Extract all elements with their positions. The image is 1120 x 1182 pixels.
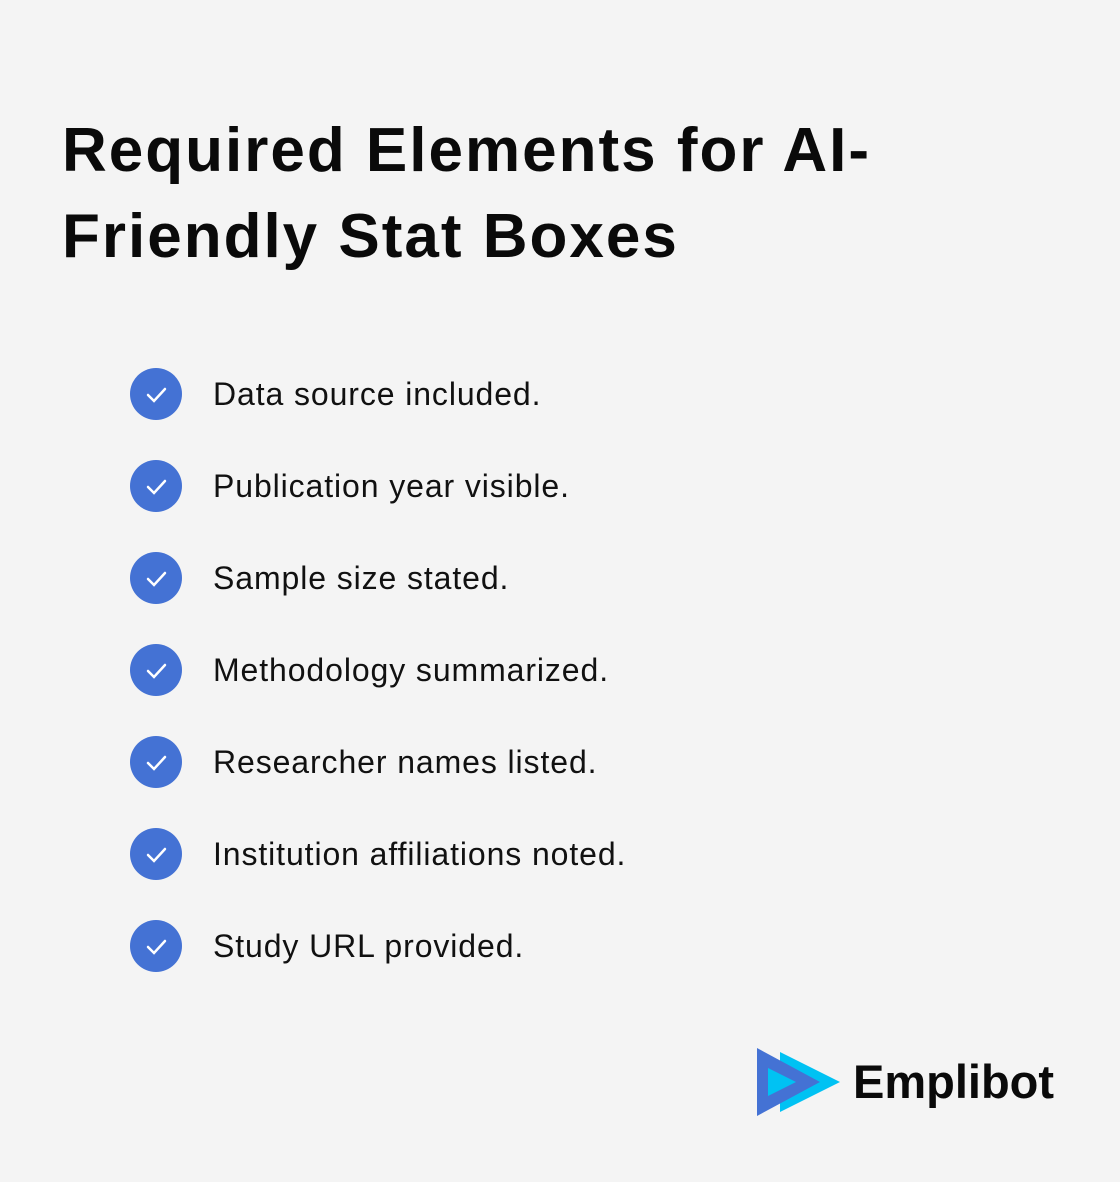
logo — [757, 1048, 1054, 1116]
item: institution — [130, 828, 626, 880]
logo: Emplibot — [853, 1055, 1054, 1108]
item: study url: Study URL provided. — [213, 928, 524, 964]
item: data source — [130, 368, 541, 420]
title — [62, 116, 871, 271]
item: researcher names: Researcher names listed. — [213, 744, 597, 780]
item: methodology — [130, 644, 609, 696]
item: publication year: Publication year visible. — [213, 468, 570, 504]
title: Friendly Stat Boxes — [62, 202, 679, 271]
item: sample size: Sample size stated. — [213, 560, 509, 596]
title: Required Elements for AI- — [62, 116, 871, 185]
item: researcher names — [130, 736, 597, 788]
item: methodology: Methodology summarized. — [213, 652, 609, 688]
item: data source: Data source included. — [213, 376, 541, 412]
item: study url — [130, 920, 524, 972]
item: publication year — [130, 460, 570, 512]
item: institution: Institution affiliations noted. — [213, 836, 626, 872]
item: sample size — [130, 552, 509, 604]
